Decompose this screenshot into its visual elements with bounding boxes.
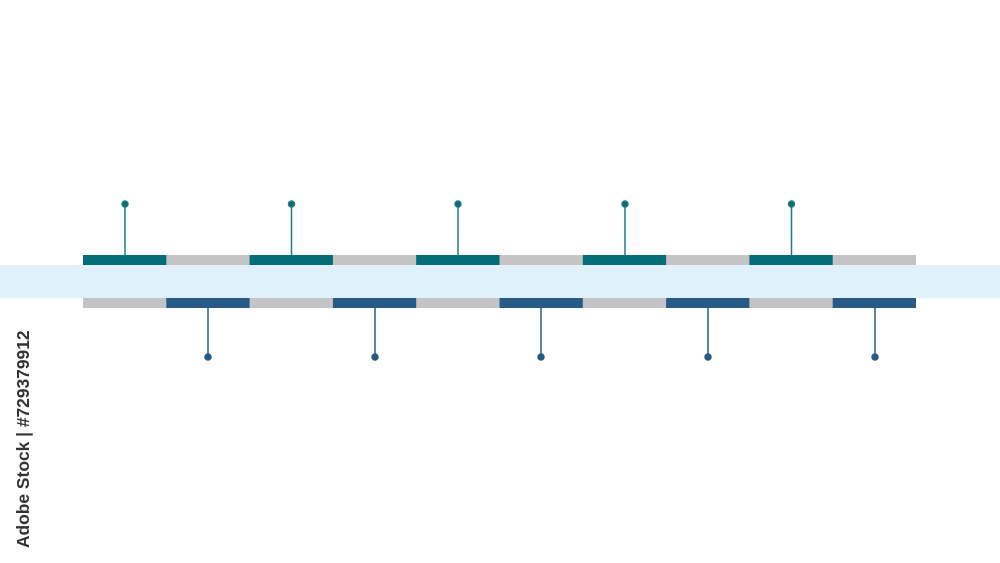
side credit text: Adobe Stock | #729379912 [13, 330, 33, 548]
bottom pins [205, 308, 878, 360]
bottom bar [83, 298, 916, 308]
top bar [83, 255, 916, 265]
top pins [122, 201, 794, 255]
light band [0, 265, 1000, 298]
